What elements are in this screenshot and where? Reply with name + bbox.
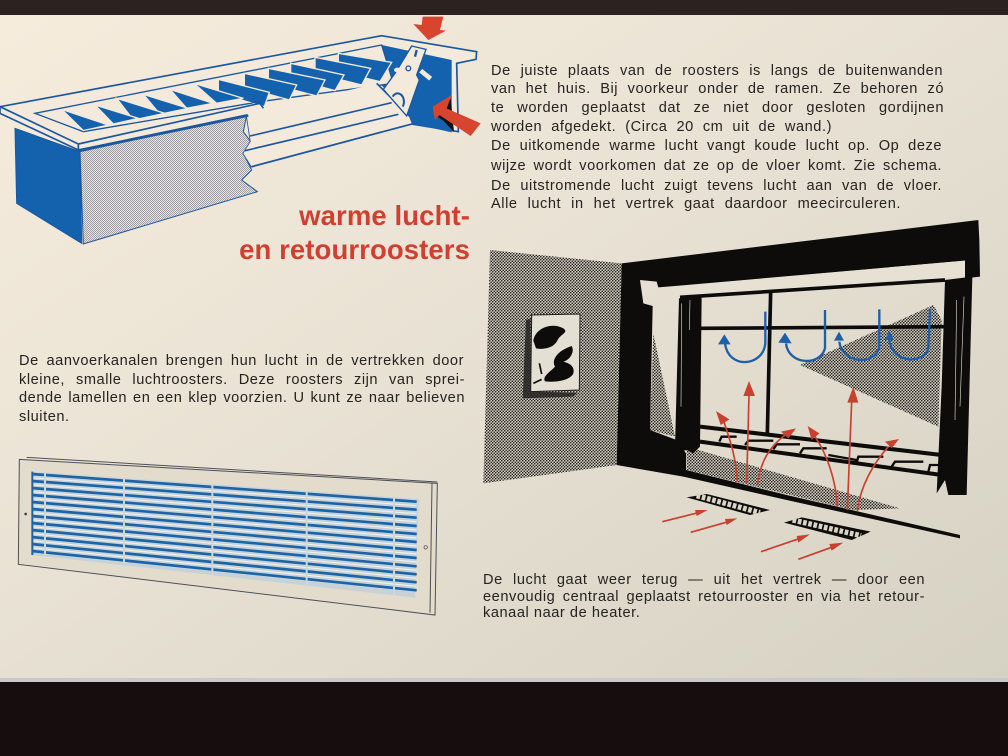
lower duct body	[243, 83, 412, 167]
text block: placement of the registers: worden afgedekt. (Circa 20 cm uit de wand.)	[491, 119, 832, 135]
opening	[35, 45, 393, 132]
text block: placement of the registers: Alle lucht in het vertrek gaat daardoor meecirculeren.	[491, 196, 901, 212]
title: warme lucht-	[299, 200, 470, 231]
blue circulation arrows	[718, 309, 930, 362]
text block: supply ducts: De aanvoerkanalen brengen hun lucht in de vertrekken door	[19, 353, 464, 369]
text block: supply ducts: sluiten.	[19, 409, 70, 425]
text block: placement of the registers: te worden geplaatst dat ze niet door gesloten gordijnen	[491, 100, 944, 116]
text block: return air	[483, 572, 925, 621]
text block: return air: kanaal naar de heater.	[483, 605, 640, 621]
text block: supply ducts	[19, 353, 465, 425]
halftone wall	[483, 250, 622, 483]
red arrow: inward	[433, 95, 481, 136]
text block: supply ducts: kleine, smalle luchtroosters. Deze roosters zijn van sprei-	[19, 372, 465, 388]
text block: placement of the registers: van het huis. Bij voorkeur onder de ramen. Ze behoren zó	[491, 81, 944, 97]
floor grille 2	[784, 517, 871, 540]
wall grille	[18, 457, 437, 615]
text block: return air: eenvoudig centraal geplaatst retourrooster en via het retour-	[483, 589, 925, 605]
blue interior	[380, 45, 452, 132]
poster	[523, 314, 580, 398]
radiator	[700, 427, 942, 475]
title: en retourroosters	[239, 234, 470, 265]
louvre slats	[62, 53, 392, 131]
left curtain	[675, 295, 702, 453]
floor grille 1	[687, 494, 770, 515]
text block: placement of the registers: De uitkomende warme lucht vangt koude lucht op. Op deze	[491, 138, 942, 154]
shadow halftones	[800, 305, 942, 427]
cream curtain rail	[673, 261, 965, 297]
text block: placement of the registers: De uitstromende lucht zuigt tevens lucht aan van de vloer.	[491, 178, 942, 194]
text block: placement of the registers: De juiste plaats van de roosters is langs de buitenwanden	[491, 63, 943, 79]
text block: return air: De lucht gaat weer terug — uit het vertrek — door een	[483, 572, 925, 588]
red arrows	[662, 381, 899, 559]
room schematic	[483, 220, 980, 559]
right curtain	[937, 277, 972, 495]
text block: placement of the registers: wijze wordt voorkomen dat ze op de vloer komt. Zie schema.	[491, 158, 942, 174]
red arrow: down	[413, 17, 446, 40]
text block: placement of the registers	[491, 63, 944, 212]
blue slat lines	[32, 474, 417, 590]
title	[239, 200, 470, 265]
register frame	[0, 36, 477, 167]
text block: supply ducts: dende lamellen en een klep voorzien. U kunt ze naar believen	[19, 390, 465, 406]
damper lever	[383, 46, 431, 116]
black window surround	[617, 220, 980, 538]
window bars	[680, 280, 945, 433]
duct illustration	[0, 17, 481, 244]
duct side faces	[15, 115, 257, 244]
